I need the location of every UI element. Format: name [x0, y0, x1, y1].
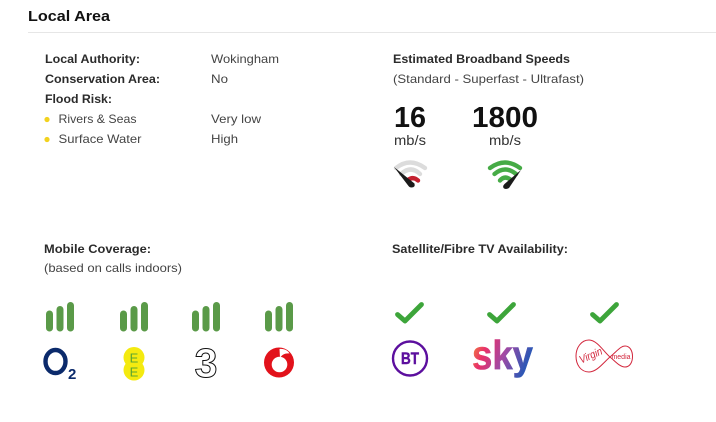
section title: Local Area: Local Area: [28, 9, 111, 25]
panel: broadband speeds: 1800: [472, 102, 538, 134]
logo: Virgin Media: Virgin: [578, 346, 604, 366]
icon: check Sky: [490, 304, 514, 321]
panel: local area details: No: [211, 72, 228, 86]
panel: broadband speeds: (Standard - Superfast - Ultrafast): [393, 72, 584, 86]
logo: Virgin Media: media: [611, 354, 631, 361]
logo: Vodafone: [264, 348, 294, 378]
panel: local area details: High: [211, 132, 238, 146]
panel: mobile coverage: [44, 242, 294, 386]
panel: local area details: Flood Risk:: [45, 92, 112, 106]
icon: check BT: [398, 304, 422, 321]
panel: mobile coverage: Mobile Coverage:: [44, 242, 151, 256]
logo: EE: [124, 347, 144, 380]
panel: satellite and fibre TV: [392, 242, 632, 378]
icon: signal bars Vodafone: [265, 302, 293, 332]
panel: local area details: Wokingham: [211, 52, 279, 66]
panel: satellite and fibre TV: Satellite/Fibre TV Availability:: [392, 242, 568, 256]
panel: local area details: Local Authority:: [45, 52, 140, 66]
logo: BT: [393, 342, 427, 376]
icon: slow speed gauge: [394, 162, 425, 188]
panel: mobile coverage: (based on calls indoors): [44, 261, 182, 275]
logo: Three: 3: [195, 340, 217, 386]
icon: signal bars Three: [192, 302, 220, 332]
panel: broadband speeds: mb/s: [394, 132, 426, 148]
logo: EE: E: [130, 364, 139, 380]
panel: local area details: Surface Water: [58, 132, 142, 146]
panel: broadband speeds: 16: [394, 102, 426, 134]
panel: local area details: Very low: [211, 112, 261, 126]
logo: BT: BT: [401, 350, 419, 368]
panel: broadband speeds: mb/s: [489, 132, 521, 148]
logo: O2: 2: [68, 366, 76, 383]
icon: check Virgin: [592, 304, 616, 321]
logo: Virgin Media: [576, 340, 632, 372]
panel: broadband speeds: [393, 52, 584, 189]
panel: local area details: Conservation Area:: [45, 72, 160, 86]
icon: signal bars EE: [120, 302, 148, 332]
panel: local area details: Rivers & Seas: [58, 112, 136, 126]
panel: local area details: [44, 52, 279, 146]
logo: Sky: sky: [472, 332, 533, 378]
logo: EE: E: [130, 350, 139, 366]
logo: O2: [46, 350, 76, 383]
panel: broadband speeds: Estimated Broadband Speeds: [393, 52, 570, 66]
icon: fast speed gauge: [490, 162, 521, 189]
icon: signal bars O2: [46, 302, 74, 332]
